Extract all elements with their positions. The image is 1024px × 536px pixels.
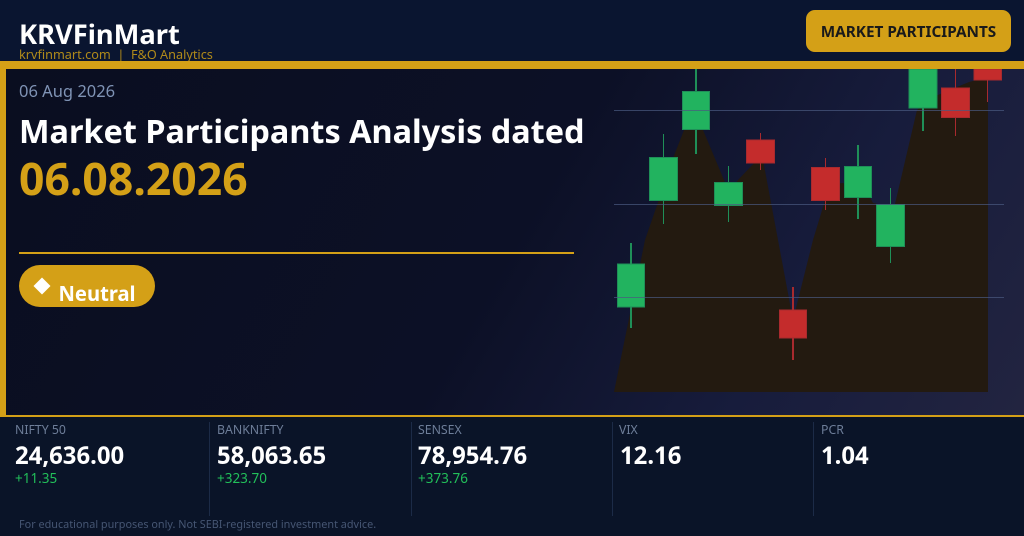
stat: PCR: PCR <box>821 421 844 438</box>
gold header rule <box>0 61 1024 69</box>
disclaimer: For educational purposes only. Not SEBI-registered investment advice. <box>19 517 376 532</box>
stat: NIFTY 50: 24,636.00 <box>15 439 124 472</box>
stat: VIX: 12.16 <box>620 439 681 472</box>
headline date: 06.08.2026 <box>19 148 248 209</box>
left gold accent <box>0 69 6 415</box>
sentiment label: Neutral <box>58 279 136 307</box>
stat: BANKNIFTY <box>217 421 326 487</box>
stat: NIFTY 50: NIFTY 50 <box>15 421 66 438</box>
grid lines <box>614 110 1004 298</box>
headline: Market Participants Analysis dated <box>19 109 585 153</box>
stat strip <box>0 417 1024 536</box>
stat: SENSEX: SENSEX <box>418 421 462 438</box>
stat: BANKNIFTY: +323.70 <box>217 469 267 487</box>
stat: VIX <box>619 421 681 472</box>
stat: NIFTY 50 <box>15 421 124 487</box>
stat: BANKNIFTY: 58,063.65 <box>217 439 326 472</box>
gold footer rule <box>0 415 1024 417</box>
stat: SENSEX: 78,954.76 <box>418 439 527 472</box>
candlestick chart <box>614 69 1004 392</box>
area silhouette <box>614 80 988 392</box>
brand subtitle: krvfinmart.com | F&O Analytics <box>19 45 213 63</box>
category badge: MARKET PARTICIPANTS <box>821 22 996 42</box>
stat: VIX: VIX <box>619 421 638 438</box>
stat: SENSEX: +373.76 <box>418 469 468 487</box>
brand name: KRVFinMart <box>19 15 180 52</box>
category badge <box>806 10 1011 52</box>
stat: PCR: 1.04 <box>821 439 869 472</box>
icon: diamond <box>34 278 50 294</box>
date label: 06 Aug 2026 <box>19 79 115 102</box>
stat: NIFTY 50: +11.35 <box>15 469 57 487</box>
stat: SENSEX <box>418 421 527 487</box>
stat: BANKNIFTY: BANKNIFTY <box>217 421 284 438</box>
candles <box>618 69 1002 360</box>
main panel <box>0 69 1024 415</box>
gold divider <box>19 252 574 254</box>
header bar <box>0 0 1024 61</box>
sentiment pill <box>19 265 155 307</box>
